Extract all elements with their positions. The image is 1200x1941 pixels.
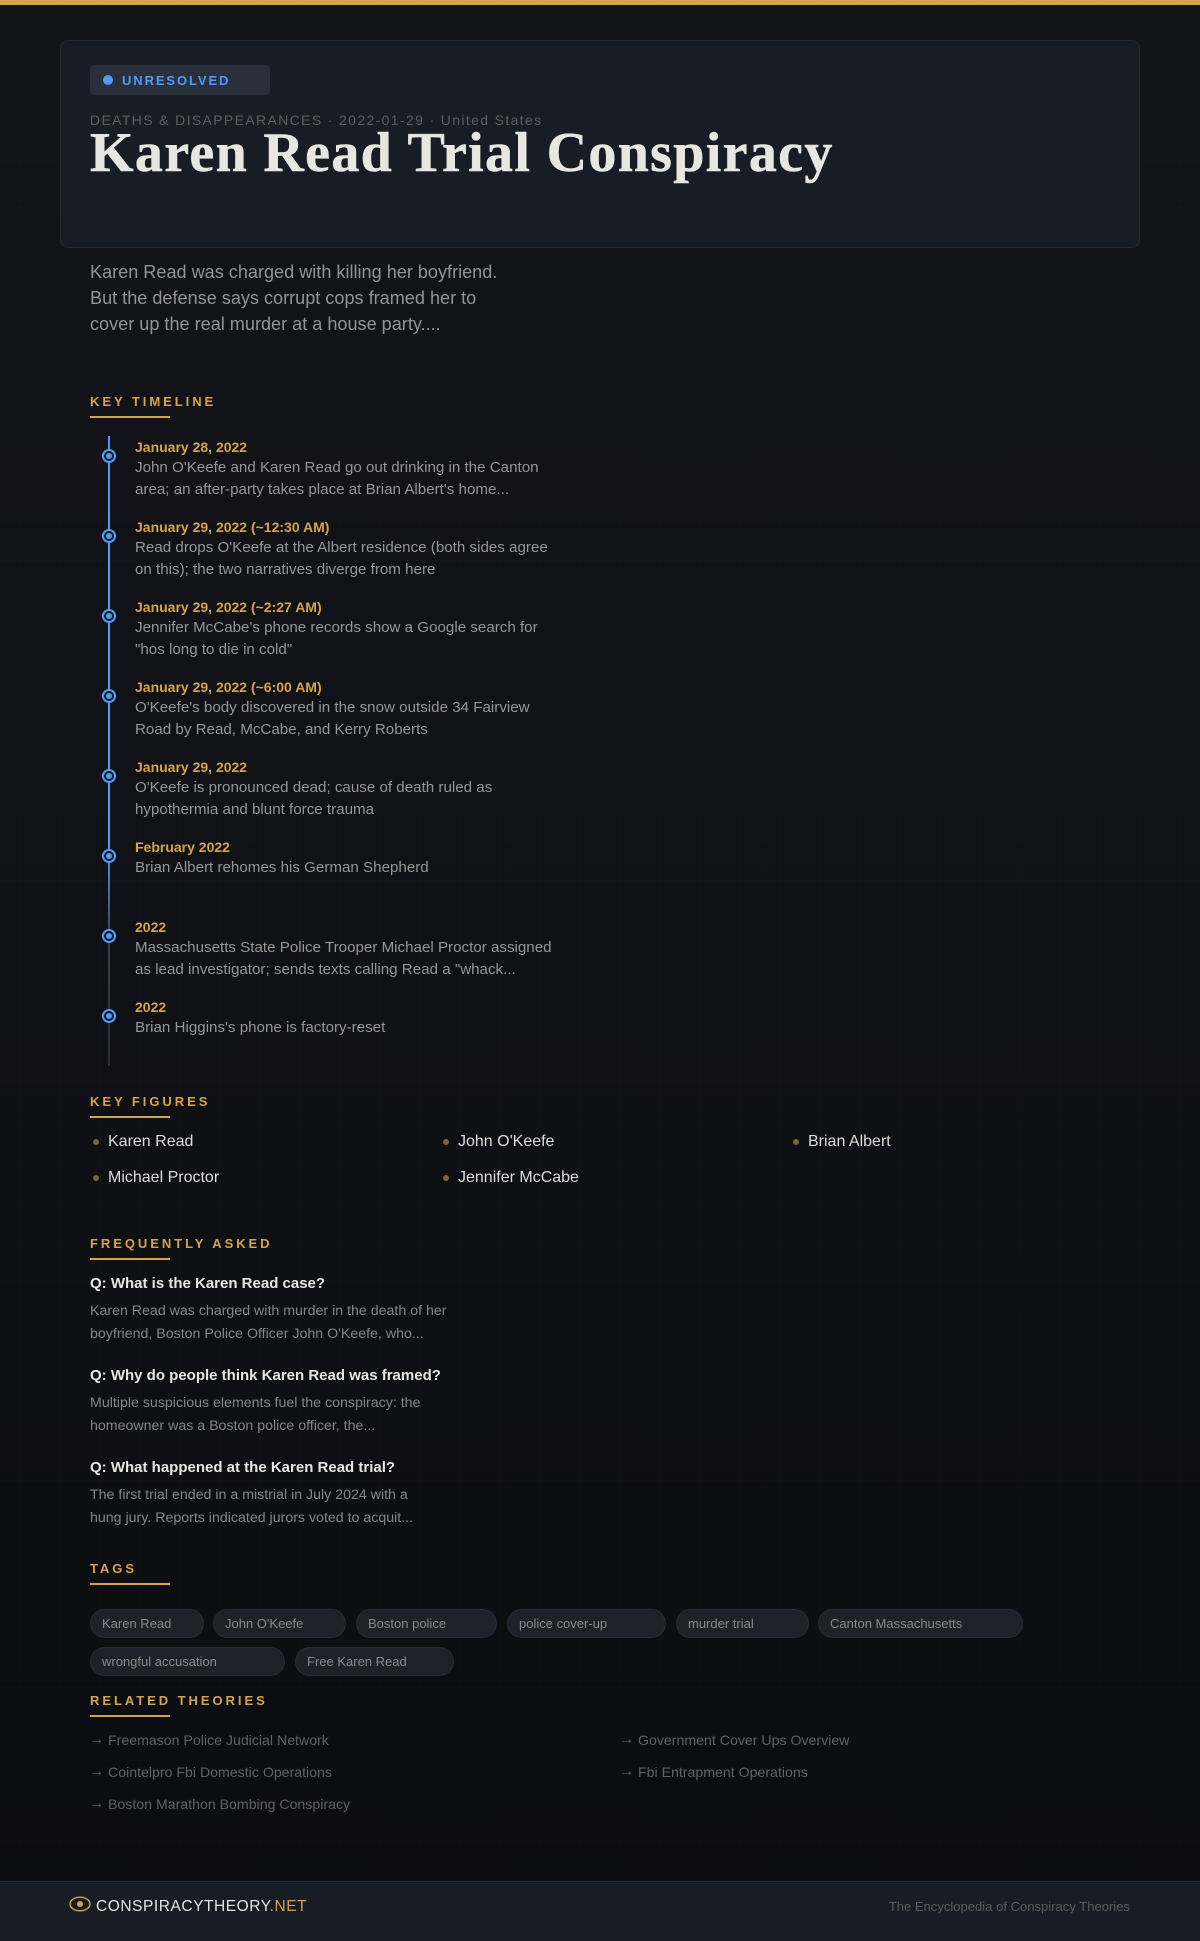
tag: police cover-up	[519, 1616, 607, 1631]
heading: tags: TAGS	[90, 1561, 137, 1576]
timeline entry 8	[135, 999, 386, 1036]
timeline entry 2	[135, 519, 548, 578]
intro text	[90, 262, 497, 334]
timeline entry 5: January 29, 2022	[135, 759, 247, 775]
tag: murder trial	[688, 1616, 754, 1631]
intro text: But the defense says corrupt cops framed her to	[90, 288, 476, 308]
tag	[90, 1647, 285, 1676]
timeline entry 2: on this); the two narratives diverge from here	[135, 561, 435, 578]
timeline marker 4	[102, 689, 116, 703]
timeline entry 3: "hos long to die in cold"	[135, 641, 292, 658]
tag	[507, 1609, 666, 1638]
intro text: Karen Read was charged with killing her boyfriend.	[90, 262, 497, 282]
figure: Jennifer McCabe: Jennifer McCabe	[458, 1169, 579, 1186]
icon: eye logo	[69, 1896, 91, 1912]
heading: key timeline: KEY TIMELINE	[90, 394, 216, 409]
figure: Karen Read: Karen Read	[108, 1133, 193, 1150]
status badge	[90, 65, 270, 95]
figure: John O'Keefe: John O'Keefe	[458, 1133, 554, 1150]
timeline marker 2	[102, 529, 116, 543]
heading: key figures: KEY FIGURES	[90, 1094, 210, 1109]
logo wordmark: CONSPIRACYTHEORY.NET	[96, 1898, 307, 1915]
faq 2	[90, 1367, 441, 1434]
tag	[90, 1609, 204, 1638]
faq 2: homeowner was a Boston police officer, the...	[90, 1418, 375, 1434]
related link: Freemason Police Judicial Network	[108, 1732, 329, 1748]
related link: →	[89, 1763, 104, 1780]
related link: Boston Marathon Bombing Conspiracy	[108, 1796, 350, 1812]
timeline entry 7	[135, 919, 552, 978]
heading: frequently asked: FREQUENTLY ASKED	[90, 1236, 273, 1251]
icon: status dot	[103, 75, 113, 85]
tag	[213, 1609, 346, 1638]
timeline entry 6: Brian Albert rehomes his German Shepherd	[135, 859, 429, 876]
related link: →	[89, 1731, 104, 1748]
heading: related theories: RELATED THEORIES	[90, 1693, 268, 1708]
timeline entry 1: area; an after-party takes place at Brian Albert's home...	[135, 481, 509, 498]
related link: Government Cover Ups Overview	[638, 1732, 849, 1748]
related link: →	[89, 1795, 104, 1812]
timeline	[108, 436, 110, 1066]
tag: Canton Massachusetts	[830, 1616, 962, 1631]
title: Karen Read Trial Conspiracy	[90, 122, 834, 184]
timeline entry 5: hypothermia and blunt force trauma	[135, 801, 374, 818]
timeline marker 1	[102, 449, 116, 463]
tag	[295, 1647, 454, 1676]
tag: wrongful accusation	[102, 1654, 217, 1669]
faq 1	[90, 1275, 446, 1342]
timeline entry 8: 2022	[135, 999, 166, 1015]
timeline entry 7: Massachusetts State Police Trooper Michael Proctor assigned	[135, 939, 552, 956]
timeline entry 6	[135, 839, 429, 876]
footer tagline: The Encyclopedia of Conspiracy Theories	[889, 1899, 1130, 1914]
figure: Michael Proctor: Michael Proctor	[108, 1169, 219, 1186]
intro text: cover up the real murder at a house party....	[90, 314, 441, 334]
timeline marker 8	[102, 1009, 116, 1023]
tag	[818, 1609, 1023, 1638]
timeline entry 8: Brian Higgins's phone is factory-reset	[135, 1019, 385, 1036]
tag: Boston police	[368, 1616, 446, 1631]
faq 3: hung jury. Reports indicated jurors voted to acquit...	[90, 1510, 413, 1526]
timeline entry 1: John O'Keefe and Karen Read go out drinking in the Canton	[135, 459, 539, 476]
related link: Cointelpro Fbi Domestic Operations	[108, 1764, 332, 1780]
timeline entry 6: February 2022	[135, 839, 230, 855]
panel: header card	[60, 40, 1140, 248]
tag	[676, 1609, 809, 1638]
timeline entry 1	[135, 439, 539, 498]
related link: →	[619, 1731, 634, 1748]
category meta line: DEATHS & DISAPPEARANCES · 2022-01-29 · United States	[90, 112, 542, 128]
timeline entry 7: as lead investigator; sends texts calling Read a "whack...	[135, 961, 516, 978]
timeline entry 4: O'Keefe's body discovered in the snow outside 34 Fairview	[135, 699, 530, 716]
faq 1: Q: What is the Karen Read case?	[90, 1275, 325, 1292]
timeline marker 6	[102, 849, 116, 863]
faq 1: boyfriend, Boston Police Officer John O'Keefe, who...	[90, 1326, 424, 1342]
timeline entry 2: January 29, 2022 (~12:30 AM)	[135, 519, 329, 535]
related link: →	[619, 1763, 634, 1780]
timeline entry 5: O'Keefe is pronounced dead; cause of death ruled as	[135, 779, 492, 796]
timeline entry 1: January 28, 2022	[135, 439, 247, 455]
faq 1: Karen Read was charged with murder in the death of her	[90, 1303, 446, 1319]
timeline marker 5	[102, 769, 116, 783]
faq 2: Multiple suspicious elements fuel the conspiracy: the	[90, 1395, 420, 1411]
tag	[356, 1609, 497, 1638]
status label: UNRESOLVED	[122, 73, 230, 88]
figure: Brian Albert: Brian Albert	[808, 1133, 891, 1150]
tag: Karen Read	[102, 1616, 171, 1631]
timeline entry 3: Jennifer McCabe's phone records show a Google search for	[135, 619, 538, 636]
timeline entry 4	[135, 679, 530, 738]
related link: Fbi Entrapment Operations	[638, 1764, 808, 1780]
timeline marker 3	[102, 609, 116, 623]
faq 3	[90, 1459, 413, 1526]
footer	[0, 1881, 1200, 1941]
faq 3: Q: What happened at the Karen Read trial?	[90, 1459, 395, 1476]
timeline marker 7	[102, 929, 116, 943]
timeline entry 3	[135, 599, 538, 658]
timeline axis	[108, 436, 110, 1066]
timeline entry 5	[135, 759, 492, 818]
timeline entry 2: Read drops O'Keefe at the Albert residence (both sides agree	[135, 539, 548, 556]
timeline entry 7: 2022	[135, 919, 166, 935]
timeline entry 4: January 29, 2022 (~6:00 AM)	[135, 679, 322, 695]
tag: John O'Keefe	[225, 1616, 303, 1631]
top accent bar	[0, 0, 1200, 5]
tag: Free Karen Read	[307, 1654, 407, 1669]
faq 2: Q: Why do people think Karen Read was framed?	[90, 1367, 441, 1384]
faq 3: The first trial ended in a mistrial in July 2024 with a	[90, 1487, 408, 1503]
timeline entry 4: Road by Read, McCabe, and Kerry Roberts	[135, 721, 428, 738]
timeline entry 3: January 29, 2022 (~2:27 AM)	[135, 599, 322, 615]
